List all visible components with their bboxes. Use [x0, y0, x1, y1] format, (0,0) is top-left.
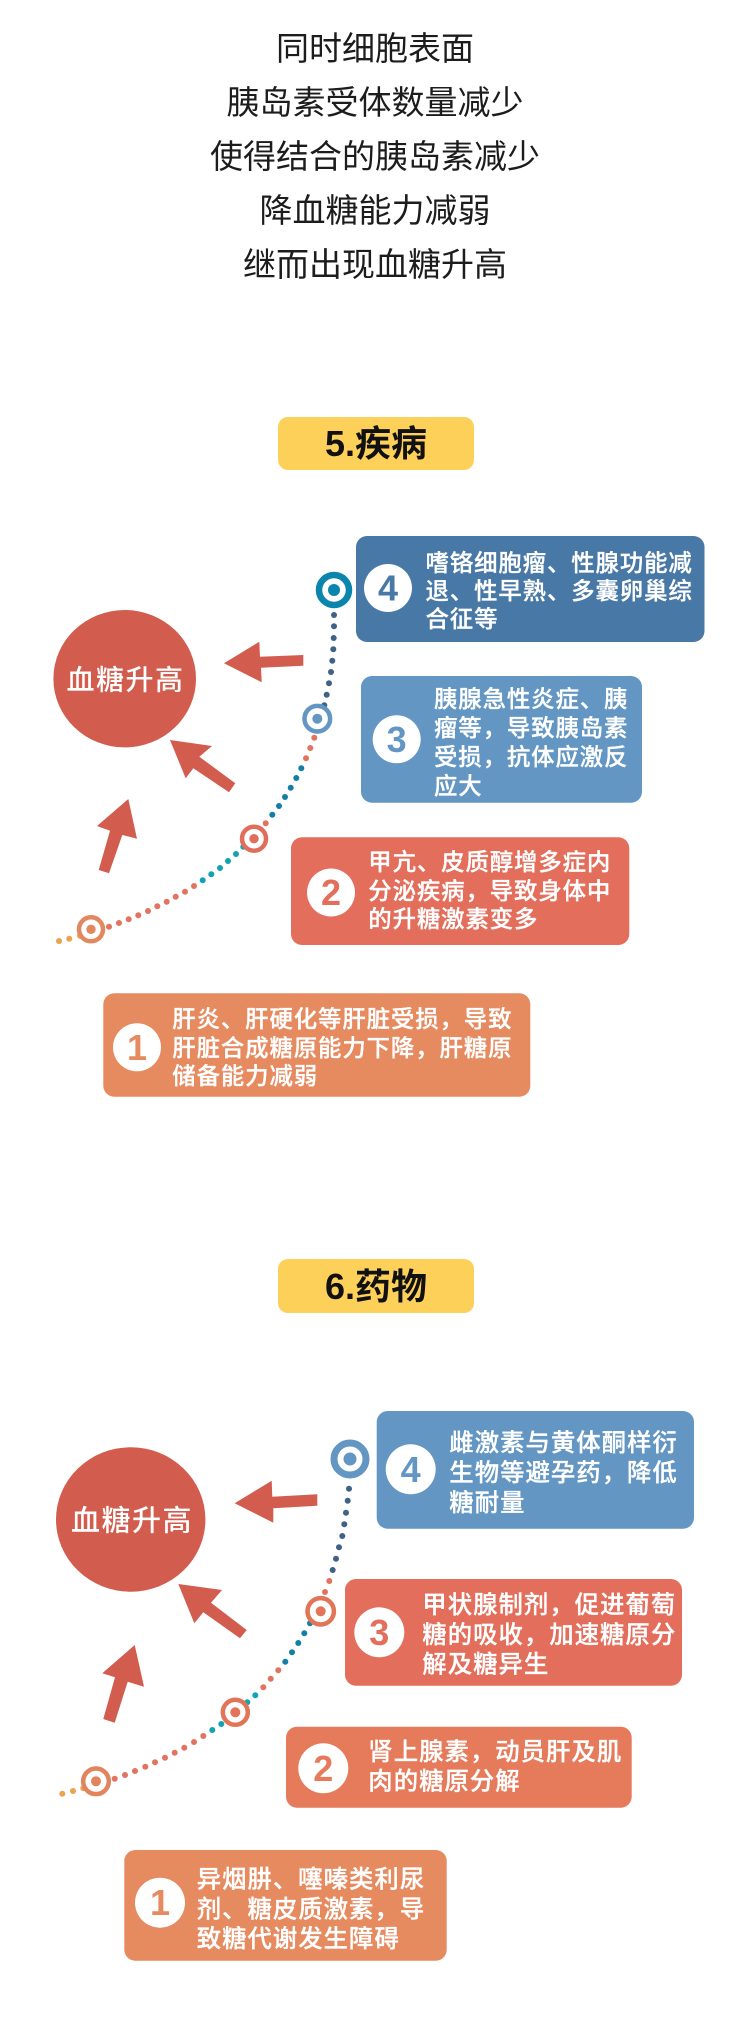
- text: stage 1: 储备能力减弱: [172, 1063, 318, 1089]
- panel: stage 3: [345, 1579, 682, 1686]
- panel: stage 4: [356, 536, 704, 642]
- central circle: blood sugar rises: 血糖升高: [66, 664, 185, 695]
- panel: stage 1: [124, 1850, 447, 1961]
- number badge 1: [113, 1023, 161, 1071]
- panel: stage 3: [361, 676, 642, 803]
- text: stage 3: 解及糖异生: [422, 1652, 549, 1679]
- arrow: from stage 3: [170, 740, 235, 792]
- number badge 2: [307, 868, 355, 916]
- panel: stage 2: [286, 1727, 632, 1808]
- text: stage 1: 异烟肼、噻嗪类利尿: [197, 1867, 425, 1894]
- text block: intro lines: 胰岛素受体数量减少: [226, 84, 524, 121]
- heading: 6.drugs: [278, 1259, 474, 1313]
- text: stage 2: 甲亢、皮质醇增多症内: [368, 849, 611, 875]
- arrow: from stage 2: [97, 799, 137, 873]
- central circle: blood sugar rises: [56, 1447, 205, 1592]
- heading: 5.disease: 5.疾病: [325, 423, 427, 464]
- number badge 3: 3: [369, 1612, 389, 1653]
- text: stage 2: 分泌疾病，导致身体中: [368, 878, 611, 904]
- number badge 3: 3: [387, 719, 407, 760]
- arrow: from stage 4: [235, 1481, 317, 1523]
- marker: stage 4: [334, 1443, 366, 1475]
- text: stage 4: 嗜铬细胞瘤、性腺功能减: [426, 550, 693, 576]
- text: stage 3: 胰腺急性炎症、胰: [434, 686, 628, 712]
- heading: 6.drugs: 6.药物: [325, 1266, 427, 1307]
- dotted curve: [56, 612, 337, 944]
- number badge 1: [135, 1878, 185, 1928]
- number badge 2: 2: [313, 1748, 333, 1789]
- text: stage 2: 的升糖激素变多: [368, 906, 538, 932]
- number badge 1: 1: [127, 1027, 147, 1068]
- text block: intro lines: 同时细胞表面: [276, 30, 474, 67]
- number badge 3: [373, 715, 421, 763]
- text: stage 4: 生物等避孕药，降低: [449, 1460, 678, 1487]
- text block: intro lines: [210, 30, 540, 283]
- text: stage 1: 剂、糖皮质激素，导: [197, 1897, 425, 1924]
- number badge 4: [364, 564, 412, 612]
- number badge 3: [354, 1607, 404, 1657]
- text: stage 3: 应大: [434, 773, 483, 799]
- marker: stage 4: [319, 575, 349, 605]
- text: stage 3: 瘤等，导致胰岛素: [434, 715, 628, 741]
- text: stage 2: 肾上腺素，动员肝及肌: [368, 1739, 622, 1766]
- panel: stage 4: [377, 1411, 694, 1529]
- central circle: blood sugar rises: [53, 610, 196, 747]
- number badge 2: [298, 1743, 348, 1793]
- heading: 5.disease: [278, 417, 474, 470]
- number badge 4: 4: [378, 568, 398, 608]
- text: stage 3: 甲状腺制剂，促进葡萄: [422, 1592, 676, 1619]
- text: stage 1: 肝脏合成糖原能力下降，肝糖原: [172, 1035, 512, 1061]
- text: stage 4: 糖耐量: [449, 1490, 525, 1517]
- arrow: from stage 2: [102, 1645, 144, 1723]
- marker: stage 3: [304, 706, 330, 732]
- number badge 4: 4: [401, 1449, 421, 1490]
- marker: stage 2: [242, 827, 266, 851]
- panel: stage 2: [291, 837, 629, 945]
- text block: intro lines: 继而出现血糖升高: [243, 246, 507, 283]
- text: stage 2: 肉的糖原分解: [368, 1768, 521, 1795]
- text: stage 4: 合征等: [426, 606, 498, 632]
- text: stage 3: 糖的吸收，加速糖原分: [422, 1622, 676, 1649]
- text: stage 1: 肝炎、肝硬化等肝脏受损，导致: [172, 1006, 512, 1032]
- number badge 2: 2: [321, 872, 341, 913]
- arrow: from stage 3: [178, 1584, 247, 1638]
- marker: stage 3: [308, 1598, 334, 1625]
- number badge 1: 1: [150, 1882, 170, 1923]
- marker: stage 2: [223, 1700, 248, 1725]
- number badge 4: [386, 1444, 436, 1494]
- marker: stage 1: [83, 1768, 109, 1794]
- text block: intro lines: 降血糖能力减弱: [260, 192, 490, 229]
- arrow: from stage 4: [224, 642, 303, 682]
- text: stage 4: 退、性早熟、多囊卵巢综: [426, 578, 693, 604]
- marker: stage 1: [79, 917, 103, 941]
- panel: section 5 disease: [53, 417, 704, 1097]
- text: stage 1: 致糖代谢发生障碍: [197, 1926, 400, 1953]
- text: stage 4: 雌激素与黄体酮样衍: [449, 1430, 678, 1457]
- text: stage 3: 受损，抗体应激反: [434, 744, 628, 770]
- text block: intro lines: 使得结合的胰岛素减少: [210, 138, 540, 175]
- dotted curve: [59, 1486, 352, 1797]
- panel: stage 1: [103, 993, 530, 1097]
- panel: section 6 drugs: [56, 1259, 694, 1961]
- central circle: blood sugar rises: 血糖升高: [71, 1504, 193, 1538]
